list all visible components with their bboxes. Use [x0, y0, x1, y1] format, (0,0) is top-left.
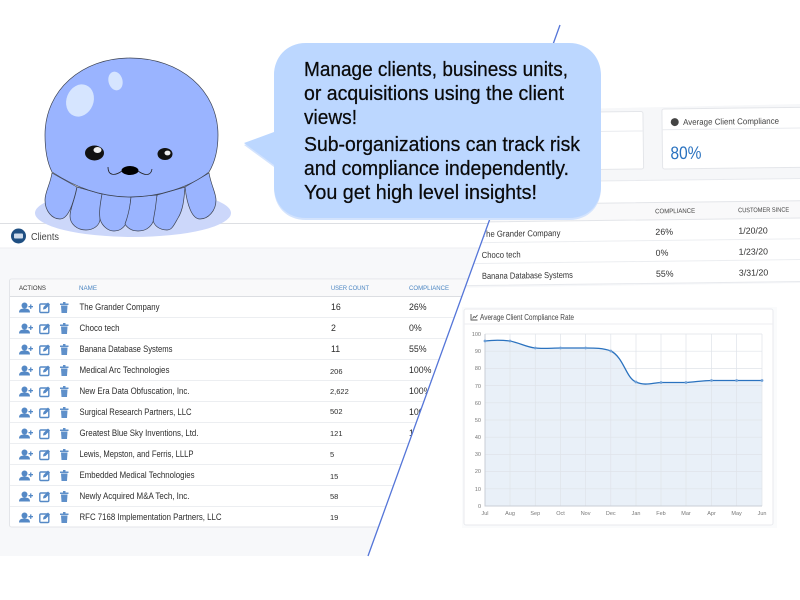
- line chart: 20: [475, 469, 481, 475]
- user counts: 121: [330, 429, 343, 438]
- table: client summary: 55%: [656, 269, 674, 279]
- table: client summary: CUSTOMER SINCE: [738, 207, 790, 214]
- value: 80%: 80%: [670, 143, 702, 163]
- line chart: [472, 332, 766, 517]
- line chart: 90: [475, 349, 481, 355]
- user counts: 16: [331, 302, 341, 312]
- mascot shadow: [35, 189, 231, 237]
- compliance values: 100%: [409, 365, 432, 375]
- client names: Choco tech: [80, 323, 120, 333]
- client names: The Grander Company: [80, 302, 160, 312]
- client names: Lewis, Mepston, and Ferris, LLLP: [80, 449, 194, 459]
- card: previous stat: [601, 111, 644, 170]
- diagonal divider: [368, 25, 560, 556]
- chart backdrop: [462, 307, 777, 528]
- table header: ACTIONS: [19, 285, 47, 292]
- compliance values: [409, 302, 432, 438]
- table: client summary: COMPLIANCE: [655, 208, 696, 215]
- chart card: average client compliance rate: [464, 309, 773, 525]
- compliance values: 0%: [409, 323, 422, 333]
- line chart: Sep: [530, 511, 540, 517]
- line chart: 60: [475, 401, 481, 407]
- line chart: Mar: [681, 511, 691, 517]
- compliance values: 55%: [409, 344, 427, 354]
- client names: [80, 302, 222, 522]
- panel: clients list view: [0, 223, 488, 528]
- table: client summary: Client Compliance: [528, 189, 599, 200]
- line chart: 100: [472, 332, 481, 338]
- line chart: 80: [475, 366, 481, 372]
- client names: Newly Acquired M&A Tech, Inc.: [80, 491, 190, 501]
- compliance values: 100%: [409, 407, 432, 417]
- line chart: 40: [475, 435, 481, 441]
- user counts: 11: [331, 344, 340, 354]
- line chart: 70: [475, 384, 481, 390]
- line chart: Jun: [758, 511, 766, 517]
- table: client summary: 1/20/20: [738, 225, 768, 236]
- table: client summary: 3/31/20: [739, 267, 768, 278]
- callout text: or acquisitions using the client: [304, 82, 564, 105]
- table: client summary: 26%: [655, 227, 673, 237]
- table header: NAME: [79, 285, 98, 292]
- user counts: 2,622: [330, 387, 349, 396]
- page header: [0, 223, 488, 248]
- line chart: 0: [478, 504, 481, 510]
- compliance values: 100%: [409, 386, 432, 396]
- user counts: 58: [330, 492, 338, 501]
- mascot highlights: [61, 70, 125, 121]
- line chart: Feb: [656, 511, 666, 517]
- client names: Banana Database Systems: [80, 344, 173, 354]
- line chart: Jul: [481, 511, 489, 517]
- user counts: 502: [330, 407, 343, 416]
- client names: Embedded Medical Technologies: [80, 470, 195, 480]
- table header: COMPLIANCE: [409, 285, 450, 292]
- line chart: 30: [475, 452, 481, 458]
- user counts: [330, 302, 349, 522]
- table: client summary: [440, 178, 800, 286]
- client names: Surgical Research Partners, LLC: [80, 407, 192, 417]
- client names: Greatest Blue Sky Inventions, Ltd.: [80, 428, 198, 438]
- icon: handshake badge: [11, 228, 26, 244]
- mascot face: [85, 146, 172, 175]
- icon: gauge: [671, 118, 679, 126]
- table header: [10, 286, 462, 297]
- line chart: Oct: [556, 511, 565, 517]
- line chart: Apr: [707, 511, 716, 517]
- line chart: Nov: [581, 511, 591, 517]
- line chart: 10: [475, 487, 481, 493]
- line chart: 50: [475, 418, 481, 424]
- card title: Average Client Compliance: [683, 116, 779, 127]
- action icons: [19, 302, 68, 523]
- client names: New Era Data Obfuscation, Inc.: [80, 386, 190, 396]
- table: client summary: Choco tech: [482, 249, 521, 260]
- panel: right dashboard view: [464, 104, 800, 526]
- callout: speech bubble: [244, 43, 601, 220]
- client names: RFC 7168 Implementation Partners, LLC: [80, 512, 222, 522]
- compliance values: 100%: [409, 428, 432, 438]
- callout text: views!: [304, 106, 357, 129]
- mascot: octopus: [35, 58, 231, 237]
- table: client summary: Banana Database Systems: [482, 270, 573, 281]
- line chart: Jan: [632, 511, 640, 517]
- table header: USER COUNT: [331, 285, 369, 292]
- heading: Clients: Clients: [31, 232, 59, 243]
- user counts: 19: [330, 513, 338, 522]
- user counts: 5: [330, 450, 334, 459]
- callout text: and compliance independently.: [304, 157, 569, 180]
- line chart: Aug: [505, 511, 515, 517]
- callout text: Manage clients, business units,: [304, 58, 568, 81]
- line chart: May: [731, 511, 742, 517]
- line chart: Dec: [606, 511, 616, 517]
- compliance values: 26%: [409, 302, 427, 312]
- callout text: [304, 58, 581, 204]
- right panel backdrop: [440, 104, 800, 288]
- user counts: 2: [331, 323, 336, 333]
- icon: line chart: [471, 314, 478, 320]
- callout text: Sub-organizations can track risk: [304, 133, 581, 156]
- table: clients: [9, 278, 468, 528]
- table: client summary: 0%: [656, 248, 669, 258]
- client names: Medical Arc Technologies: [80, 365, 170, 375]
- card: average client compliance: [662, 107, 800, 169]
- table: client summary: The Grander Company: [481, 228, 561, 239]
- chart title: Average Client Compliance Rate: [480, 313, 574, 322]
- callout text: You get high level insights!: [304, 181, 537, 204]
- user counts: 15: [330, 472, 338, 481]
- table: client summary: 1/23/20: [739, 246, 768, 257]
- user counts: 206: [330, 367, 343, 376]
